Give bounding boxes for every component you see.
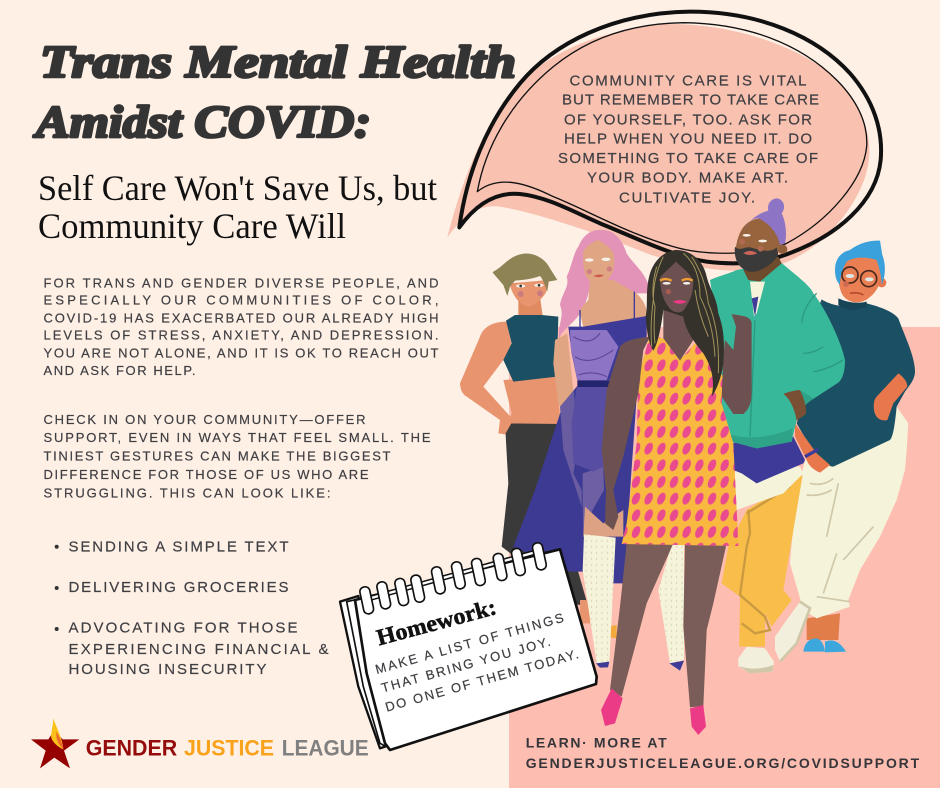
intro paragraph: FOR TRANS AND GENDER DIVERSE PEOPLE, AND <box>44 276 438 290</box>
logo star and flame <box>31 718 79 768</box>
bubble text: YOUR BODY. MAKE ART. <box>587 169 788 186</box>
bullet list <box>55 538 328 678</box>
illustration: group of five people <box>460 198 915 735</box>
notebook spiral binding <box>359 542 547 615</box>
check in paragraph: CHECK IN ON YOUR COMMUNITY—OFFER <box>44 412 366 427</box>
notebook heading: Homework: <box>374 594 499 650</box>
bullet list: HOUSING INSECURITY <box>68 661 266 678</box>
person: olive hair, crop top <box>460 254 617 638</box>
pink corner panel <box>509 327 940 788</box>
title <box>33 37 516 147</box>
notebook text: THAT BRING YOU JOY. <box>379 634 552 695</box>
logo: Gender Justice League: JUSTICE <box>184 736 274 761</box>
bullet list: DELIVERING GROCERIES <box>68 579 288 596</box>
intro paragraph <box>44 276 439 378</box>
subtitle: Self Care Won't Save Us, but <box>38 168 437 208</box>
bubble text: HELP WHEN YOU NEED IT. DO <box>564 131 812 148</box>
check in paragraph: DIFFERENCE FOR THOSE OF US WHO ARE <box>44 467 369 482</box>
notebook text: DO ONE OF THEM TODAY. <box>383 646 580 715</box>
logo: Gender Justice League: LEAGUE <box>282 736 369 761</box>
intro paragraph: LEVELS OF STRESS, ANXIETY, AND DEPRESSION. <box>44 328 438 342</box>
bubble text: CULTIVATE JOY. <box>619 189 755 206</box>
bubble text <box>558 73 819 206</box>
learn more link: LEARN· MORE AT <box>526 735 667 751</box>
notebook text <box>373 610 580 715</box>
bubble text: BUT REMEMBER TO TAKE CARE <box>562 92 819 109</box>
intro paragraph: YOU ARE NOT ALONE, AND IT IS OK TO REACH OUT <box>44 345 439 360</box>
check in paragraph <box>44 412 431 500</box>
intro paragraph: COVID-19 HAS EXACERBATED OUR ALREADY HIGH <box>44 310 438 325</box>
notebook text: MAKE A LIST OF THINGS <box>373 610 566 677</box>
check in paragraph: SUPPORT, EVEN IN WAYS THAT FEEL SMALL. THE <box>44 430 431 445</box>
title: Amidst COVID: <box>33 97 371 147</box>
speech bubble <box>447 12 881 271</box>
bullet list: EXPERIENCING FINANCIAL & <box>68 641 328 658</box>
bubble text: COMMUNITY CARE IS VITAL <box>570 73 806 90</box>
learn more link <box>526 735 920 771</box>
notebook: homework <box>340 542 597 750</box>
person: blue hair, teal sweater <box>790 241 915 652</box>
subtitle: Community Care Will <box>38 206 346 246</box>
bullet list: SENDING A SIMPLE TEXT <box>68 538 288 555</box>
logo: Gender Justice League <box>31 718 369 768</box>
bubble text: OF YOURSELF, TOO. ASK FOR <box>564 111 812 128</box>
subtitle <box>38 168 437 246</box>
logo: Gender Justice League: GENDER <box>86 736 177 761</box>
learn more link: GENDERJUSTICELEAGUE.ORG/COVIDSUPPORT <box>526 755 920 771</box>
bubble text: SOMETHING TO TAKE CARE OF <box>558 150 818 167</box>
check in paragraph: TINIEST GESTURES CAN MAKE THE BIGGEST <box>44 448 391 464</box>
title: Trans Mental Health <box>40 37 516 87</box>
person: long dark hair, yellow dress <box>601 250 752 735</box>
bullet list: ADVOCATING FOR THOSE <box>68 620 298 637</box>
person: green jacket, beard, purple bun <box>710 198 845 673</box>
person: pink hair, purple dress <box>513 230 684 671</box>
intro paragraph: ESPECIALLY OUR COMMUNITIES OF COLOR, <box>44 292 438 308</box>
intro paragraph: AND ASK FOR HELP. <box>44 363 196 378</box>
check in paragraph: STRUGGLING. THIS CAN LOOK LIKE: <box>44 485 330 500</box>
